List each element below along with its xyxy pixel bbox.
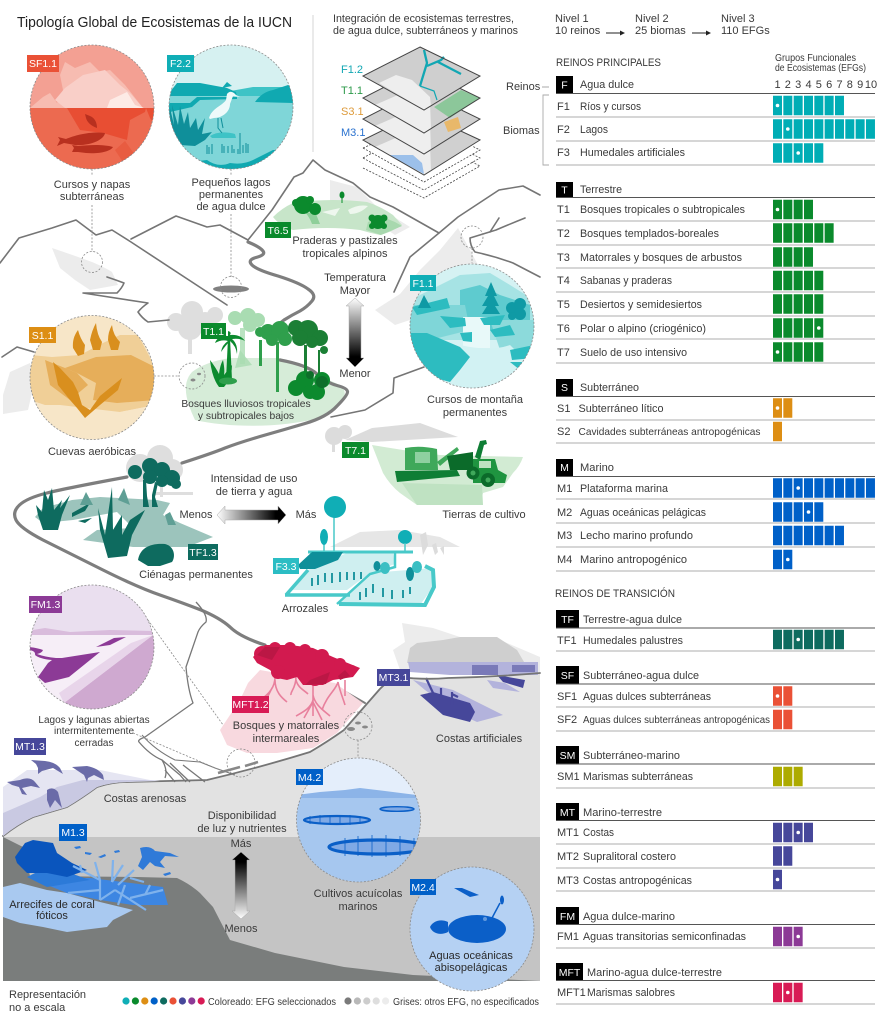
row: T3: Matorrales y bosques de arbustos bbox=[580, 252, 742, 264]
row: MT2: Supralitoral costero bbox=[583, 851, 676, 863]
panel: levels flow bbox=[555, 13, 770, 37]
coloured dots bbox=[122, 997, 336, 1008]
dashed connectors: FM1.3 bbox=[133, 620, 241, 770]
realm: MT: MT bbox=[560, 807, 576, 819]
caption: MFT1.2: intermareales bbox=[253, 733, 320, 745]
row: S1: Subterráneo lítico bbox=[578, 403, 664, 415]
row: T5 bbox=[556, 299, 875, 316]
label: F2.2 bbox=[167, 55, 194, 72]
coloured dots: Coloreado: EFG seleccionados bbox=[208, 997, 336, 1008]
label: T6.5: T6.5 bbox=[267, 225, 289, 237]
realm: F: 9 bbox=[857, 79, 863, 91]
mountain lines bbox=[0, 160, 540, 417]
row: T4 bbox=[556, 275, 875, 292]
realm: FM bbox=[556, 907, 875, 924]
label: M4.2: M4.2 bbox=[298, 772, 321, 784]
realm: F: Agua dulce bbox=[580, 79, 634, 91]
caption: F2.2 bbox=[192, 177, 271, 213]
map layer: F1.2 bbox=[363, 47, 480, 110]
arrow: light and nutrients: de luz y nutrientes bbox=[197, 823, 287, 835]
row: M3 bbox=[556, 530, 875, 547]
realm: F: 7 bbox=[836, 79, 843, 91]
label: F3.3 bbox=[273, 558, 299, 574]
realm: F: 6 bbox=[826, 79, 832, 91]
row: F2: Lagos bbox=[580, 124, 608, 136]
realm: M bbox=[556, 459, 875, 476]
illustration: M4.2 aquaculture circle bbox=[296, 758, 426, 888]
row: S2 bbox=[556, 426, 875, 443]
row: SF2: SF2 bbox=[557, 714, 577, 726]
panel: transition realms table bbox=[555, 587, 875, 1004]
row: MT2 bbox=[556, 851, 875, 868]
arrow: light and nutrients: Disponibilidad bbox=[208, 810, 276, 822]
illustration: M4.2 locator circle bbox=[344, 712, 372, 740]
labels: Reinos and Biomas bbox=[503, 81, 549, 165]
heading: functional groups bbox=[775, 53, 866, 74]
arrow: temperature: Mayor bbox=[340, 285, 371, 297]
caption: M4.2: Cultivos acuícolas bbox=[314, 888, 403, 900]
row: T3 bbox=[556, 252, 875, 268]
grey dots: Grises: otros EFG, no especificados bbox=[393, 997, 539, 1008]
label: SF1.1 bbox=[27, 55, 59, 72]
label: M1.3: M1.3 bbox=[61, 827, 85, 839]
note: not to scale: Representación bbox=[9, 989, 86, 1001]
caption: F1.1: Cursos de montaña bbox=[427, 394, 524, 406]
arrow: land use intensity bbox=[179, 473, 317, 524]
caption: SF1.1: subterráneas bbox=[60, 191, 125, 203]
panel: principal realms table bbox=[556, 53, 877, 571]
label: T6.5 bbox=[265, 222, 291, 238]
label: F1.1 bbox=[410, 275, 436, 291]
row: M3: M3 bbox=[557, 530, 572, 542]
illustration: F1.1 mountain stream circle bbox=[408, 264, 535, 388]
seabed bbox=[3, 837, 540, 981]
caption: M4.2: marinos bbox=[338, 901, 378, 913]
dashed connector: F1.1 bbox=[471, 248, 473, 263]
heading: transition realms: REINOS DE TRANSICIÓN bbox=[555, 587, 675, 600]
row: FM1 bbox=[556, 931, 875, 948]
row: M4 bbox=[556, 554, 875, 571]
row: T1 bbox=[556, 204, 875, 221]
realm: F: 3 bbox=[795, 79, 801, 91]
realm: SF bbox=[556, 666, 875, 684]
realm: MFT bbox=[556, 963, 875, 980]
title: Tipología Global de Ecosistemas de la IUCN bbox=[17, 14, 292, 31]
realm: F: 10 bbox=[865, 79, 877, 91]
caption: F2.2: de agua dulce bbox=[196, 201, 266, 213]
realm: T: Terrestre bbox=[580, 184, 622, 196]
row: M3: Lecho marino profundo bbox=[580, 530, 693, 542]
row: F1: Ríos y cursos bbox=[580, 101, 641, 113]
row: F3 bbox=[556, 147, 875, 165]
panel: levels flow: Nivel 1 bbox=[555, 13, 589, 25]
coastline bbox=[3, 673, 540, 836]
label: F3.3: F3.3 bbox=[275, 561, 297, 573]
caption: F1.1: permanentes bbox=[443, 407, 508, 419]
labels: Reinos and Biomas: Reinos bbox=[506, 81, 541, 93]
label: F2.2: F2.2 bbox=[170, 58, 191, 70]
illustration: T6.5 alpine grassland bbox=[273, 192, 402, 235]
row: F2 bbox=[556, 124, 875, 141]
caption: T1.1: Bosques lluviosos tropicales bbox=[181, 399, 311, 410]
row: MT2: MT2 bbox=[557, 851, 579, 863]
arrow: land use intensity: Menos bbox=[179, 509, 213, 521]
layer codes: F1.2 bbox=[341, 64, 363, 76]
note: not to scale bbox=[9, 989, 86, 1014]
row: M4: M4 bbox=[557, 554, 572, 566]
illustration: F3.3 rice paddies bbox=[285, 496, 460, 605]
row: F3: Humedales artificiales bbox=[580, 147, 685, 159]
row: SF1: SF1 bbox=[557, 691, 577, 703]
caption: M4.2 bbox=[314, 888, 403, 913]
illustration: MFT1.2 mangrove bbox=[220, 642, 363, 753]
caption: T6.5: Praderas y pastizales bbox=[292, 235, 398, 247]
label: M2.4: M2.4 bbox=[411, 882, 435, 894]
panel: ecosystem landscape bbox=[0, 45, 540, 991]
panel: integration of layers bbox=[333, 13, 549, 198]
realm: TF: Terrestre-agua dulce bbox=[583, 614, 682, 626]
heading: functional groups: de Ecosistemas (EFGs) bbox=[775, 63, 866, 74]
arrow: light and nutrients: Menos bbox=[224, 923, 258, 935]
illustration: estuary locator circle bbox=[218, 749, 258, 777]
row: T1: Bosques tropicales o subtropicales bbox=[580, 204, 745, 216]
realm: M: M bbox=[560, 462, 569, 474]
realm: S bbox=[556, 379, 875, 396]
row: T2: T2 bbox=[557, 228, 570, 240]
caption: MT1.3: Costas arenosas bbox=[104, 793, 187, 805]
illustration: F2.2 lake circle bbox=[165, 45, 297, 176]
realm: T bbox=[556, 182, 875, 198]
label: T1.1: T1.1 bbox=[203, 326, 224, 338]
panel: levels flow: 25 biomas bbox=[635, 25, 686, 37]
caption: FM1.3: Lagos y lagunas abiertas bbox=[38, 715, 150, 726]
grey trees: behind rainforest bbox=[167, 301, 223, 354]
label: TF1.3 bbox=[188, 544, 218, 560]
row: SF2: Aguas dulces subterráneas antropogénicas bbox=[583, 715, 770, 726]
heading: integration: Integración de ecosistemas terrestres, bbox=[333, 13, 514, 25]
caption: T1.1: y subtropicales bajos bbox=[198, 411, 294, 422]
realm: SM: Subterráneo-marino bbox=[583, 750, 680, 762]
label: FM1.3: FM1.3 bbox=[31, 599, 61, 611]
row: S1: S1 bbox=[557, 403, 570, 415]
row: MT1 bbox=[556, 827, 875, 844]
grey dots bbox=[344, 997, 539, 1008]
caption: FM1.3: intermitentemente bbox=[54, 726, 134, 737]
grey background silhouettes bbox=[3, 180, 478, 414]
estuary lines bbox=[139, 602, 235, 782]
labels: Reinos and Biomas: Biomas bbox=[503, 125, 540, 137]
row: T1: T1 bbox=[557, 204, 570, 216]
row: S2: S2 bbox=[557, 426, 570, 438]
row: MT3: MT3 bbox=[557, 875, 579, 887]
label: MT3.1 bbox=[377, 669, 410, 686]
row: M4: Marino antropogénico bbox=[580, 554, 687, 566]
row: T5: T5 bbox=[557, 299, 570, 311]
row: F1: F1 bbox=[557, 101, 570, 113]
panel: levels flow: 10 reinos bbox=[555, 25, 601, 37]
panel: levels flow: Nivel 2 bbox=[635, 13, 669, 25]
row: T6: T6 bbox=[557, 323, 570, 335]
small circle: F1.1 locator bbox=[461, 226, 483, 248]
row: T4: T4 bbox=[557, 275, 570, 287]
arrow: light and nutrients: Más bbox=[231, 838, 252, 850]
dashed connector: F2.2 bbox=[230, 169, 232, 277]
illustration: M2.4 abyssopelagic circle bbox=[410, 867, 534, 991]
dashed connector: M4.2 bbox=[357, 740, 359, 757]
layer codes: T1.1 bbox=[341, 85, 363, 97]
small circle: F2.2 locator with lake bbox=[213, 276, 249, 298]
dashed stacked layers bbox=[363, 144, 480, 198]
label: MT3.1: MT3.1 bbox=[379, 672, 409, 684]
row: FM1: Aguas transitorias semiconfinadas bbox=[583, 931, 746, 943]
label: MFT1.2: MFT1.2 bbox=[232, 699, 269, 711]
dashed connector: SF1.1 bbox=[91, 169, 93, 252]
caption: M1.3: fóticos bbox=[36, 910, 68, 922]
realm: F: F bbox=[561, 80, 568, 92]
caption: M2.4: Aguas oceánicas bbox=[429, 950, 513, 962]
caption: M2.4: abisopelágicas bbox=[435, 962, 508, 974]
illustration: M1.3 coral reef bbox=[3, 840, 179, 932]
realm: S: S bbox=[561, 382, 568, 394]
caption: F2.2: permanentes bbox=[199, 189, 264, 201]
caption: SF1.1 bbox=[54, 179, 131, 203]
arrow: light and nutrients bbox=[197, 810, 287, 935]
row: T2 bbox=[556, 228, 875, 245]
caption: M2.4 bbox=[429, 950, 513, 974]
row: SM1 bbox=[556, 771, 875, 788]
illustration: MT3.1 harbour bbox=[393, 623, 540, 722]
caption: M1.3 bbox=[9, 899, 95, 922]
dashed connector: S1.1 bbox=[154, 375, 179, 377]
row: MT1: MT1 bbox=[557, 827, 579, 839]
row: T6 bbox=[556, 323, 875, 339]
small circle: T1.1 locator bbox=[179, 363, 205, 389]
caption: T1.1 bbox=[181, 399, 311, 422]
sea bbox=[3, 837, 540, 981]
arrow: land use intensity: Intensidad de uso bbox=[211, 473, 297, 485]
caption: F1.1 bbox=[427, 394, 524, 419]
small circle: SF1.1 locator bbox=[82, 252, 102, 272]
realm: F bbox=[556, 76, 877, 94]
realm: TF: TF bbox=[561, 614, 574, 626]
label: MT1.3: MT1.3 bbox=[15, 741, 45, 753]
label: MFT1.2 bbox=[232, 696, 269, 713]
row: M1: M1 bbox=[557, 483, 572, 495]
realm: FM: FM bbox=[560, 911, 575, 923]
illustration: FM1.3 lagoon circle bbox=[28, 585, 158, 715]
label: M2.4 bbox=[410, 879, 436, 895]
caption: F2.2: Pequeños lagos bbox=[192, 177, 271, 189]
row: SF1: Aguas dulces subterráneas bbox=[583, 691, 711, 703]
realm: S: Subterráneo bbox=[580, 382, 639, 394]
realm: MT: Marino-terrestre bbox=[583, 807, 662, 819]
realm: SF: SF bbox=[561, 670, 574, 682]
realm: M: Marino bbox=[580, 462, 614, 474]
row: TF1 bbox=[556, 635, 875, 651]
illustration: T7.1 cropland bbox=[372, 440, 523, 505]
note: not to scale: no a escala bbox=[9, 1002, 66, 1014]
caption: T7.1: Tierras de cultivo bbox=[442, 509, 526, 521]
caption: S1.1: Cuevas aeróbicas bbox=[48, 446, 137, 458]
grey trees: behind cropland bbox=[325, 423, 458, 452]
row: SF1 bbox=[556, 691, 875, 707]
caption: MT3.1: Costas artificiales bbox=[436, 733, 523, 745]
label: TF1.3: TF1.3 bbox=[189, 547, 217, 559]
heading: functional groups: Grupos Funcionales bbox=[775, 53, 856, 64]
panel: levels flow: 110 EFGs bbox=[721, 25, 770, 37]
row: TF1: TF1 bbox=[557, 635, 577, 647]
label: T7.1: T7.1 bbox=[345, 445, 366, 457]
row: T3: T3 bbox=[557, 252, 570, 264]
row: F2: F2 bbox=[557, 124, 570, 136]
row: T7: Suelo de uso intensivo bbox=[580, 347, 687, 359]
caption: MFT1.2: Bosques y matorrales bbox=[233, 720, 340, 732]
realm: MFT: MFT bbox=[559, 967, 581, 979]
label: M4.2 bbox=[296, 769, 323, 785]
label: FM1.3 bbox=[29, 596, 62, 613]
realm: SM bbox=[556, 746, 875, 764]
illustration: SF1.1 groundwater circle bbox=[28, 45, 158, 173]
map layer: S3.1 bbox=[363, 90, 480, 154]
realm: SM: SM bbox=[560, 750, 575, 762]
row: FM1: FM1 bbox=[557, 931, 579, 943]
realm: MT bbox=[556, 803, 875, 820]
label: T1.1 bbox=[201, 323, 226, 339]
coastal land bbox=[3, 673, 540, 838]
row: MFT1: Marismas salobres bbox=[587, 987, 675, 999]
row: T4: Sabanas y praderas bbox=[580, 275, 672, 287]
panel: levels flow: Nivel 3 bbox=[721, 13, 755, 25]
caption: FM1.3: cerradas bbox=[75, 738, 113, 749]
heading: integration: de agua dulce, subterráneos y marinos bbox=[333, 25, 518, 37]
row: MT1: Costas bbox=[583, 827, 614, 839]
map layer: T1.1 bbox=[363, 69, 480, 133]
caption: FM1.3 bbox=[38, 715, 150, 749]
layer codes bbox=[341, 64, 365, 139]
row: M2 bbox=[556, 507, 875, 523]
layer codes: M3.1 bbox=[341, 127, 365, 139]
label: T7.1 bbox=[342, 442, 369, 458]
legend bbox=[9, 989, 539, 1014]
illustration: S1.1 cave circle bbox=[30, 316, 155, 445]
heading: main realms: REINOS PRINCIPALES bbox=[556, 57, 661, 69]
grey trees: behind wetlands bbox=[126, 445, 193, 497]
main river bbox=[15, 242, 365, 703]
row: M1 bbox=[556, 483, 875, 499]
row: MFT1: MFT1 bbox=[557, 987, 586, 999]
layer codes: S3.1 bbox=[341, 106, 364, 118]
arrow: temperature bbox=[324, 272, 387, 380]
realm: F: 1 bbox=[774, 79, 781, 91]
caption: F3.3: Arrozales bbox=[282, 603, 329, 615]
arrow: temperature: Menor bbox=[339, 368, 371, 380]
row: SM1: SM1 bbox=[557, 771, 580, 783]
realm: F: 5 bbox=[816, 79, 822, 91]
row: T6: Polar o alpino (criogénico) bbox=[580, 323, 706, 335]
caption: T6.5 bbox=[292, 235, 398, 260]
realm: T: T bbox=[561, 184, 568, 196]
caption: TF1.3: Ciénagas permanentes bbox=[139, 569, 253, 581]
realm: SF: Subterráneo-agua dulce bbox=[583, 670, 699, 682]
realm: TF bbox=[556, 610, 875, 628]
illustration: TF1.3 wetlands bbox=[35, 458, 213, 566]
row: MT3: Costas antropogénicas bbox=[583, 875, 692, 887]
row: M2: Aguas oceánicas pelágicas bbox=[580, 507, 706, 519]
caption: MFT1.2 bbox=[233, 720, 340, 745]
row: TF1: Humedales palustres bbox=[583, 635, 683, 647]
label: S1.1: S1.1 bbox=[32, 330, 53, 342]
realm: F: 4 bbox=[805, 79, 812, 91]
row: M1: Plataforma marina bbox=[580, 483, 669, 495]
arrow: land use intensity: Más bbox=[296, 509, 317, 521]
arrow: temperature: Temperatura bbox=[324, 272, 387, 284]
realm: MFT: Marino-agua dulce-terrestre bbox=[587, 967, 722, 979]
caption: M1.3: Arrecifes de coral bbox=[9, 899, 95, 911]
illustration: T1.1 rainforest bbox=[182, 308, 348, 463]
row: MT3 bbox=[556, 875, 875, 891]
caption: SF1.1: Cursos y napas bbox=[54, 179, 131, 191]
row: T2: Bosques templados-boreales bbox=[580, 228, 719, 240]
realm: F: 2 bbox=[785, 79, 791, 91]
realm: FM: Agua dulce-marino bbox=[583, 911, 675, 923]
label: MT1.3 bbox=[14, 738, 46, 755]
illustration: MT1.3 sandy coast bbox=[3, 760, 160, 836]
row: T7: T7 bbox=[557, 347, 570, 359]
row: M2: M2 bbox=[557, 507, 572, 519]
label: F1.1: F1.1 bbox=[412, 278, 434, 290]
label: M1.3 bbox=[59, 824, 87, 841]
map layer: M3.1 bbox=[363, 112, 480, 175]
row: T7 bbox=[556, 347, 875, 363]
caption: T6.5: tropicales alpinos bbox=[302, 248, 388, 260]
row: SM1: Marismas subterráneas bbox=[583, 771, 693, 783]
label: SF1.1: SF1.1 bbox=[29, 58, 57, 70]
label: S1.1 bbox=[29, 327, 56, 343]
realm: F: 8 bbox=[847, 79, 853, 91]
row: F3: F3 bbox=[557, 147, 570, 159]
row: T5: Desiertos y semidesiertos bbox=[580, 299, 702, 311]
arrow: land use intensity: de tierra y agua bbox=[216, 486, 293, 498]
row: MFT1 bbox=[556, 987, 875, 1004]
row: S2: Cavidades subterráneas antropogénicas bbox=[578, 426, 760, 438]
heading: integration bbox=[333, 13, 518, 37]
row: F1 bbox=[556, 101, 875, 117]
row: S1 bbox=[556, 403, 875, 420]
row: SF2 bbox=[556, 714, 875, 731]
